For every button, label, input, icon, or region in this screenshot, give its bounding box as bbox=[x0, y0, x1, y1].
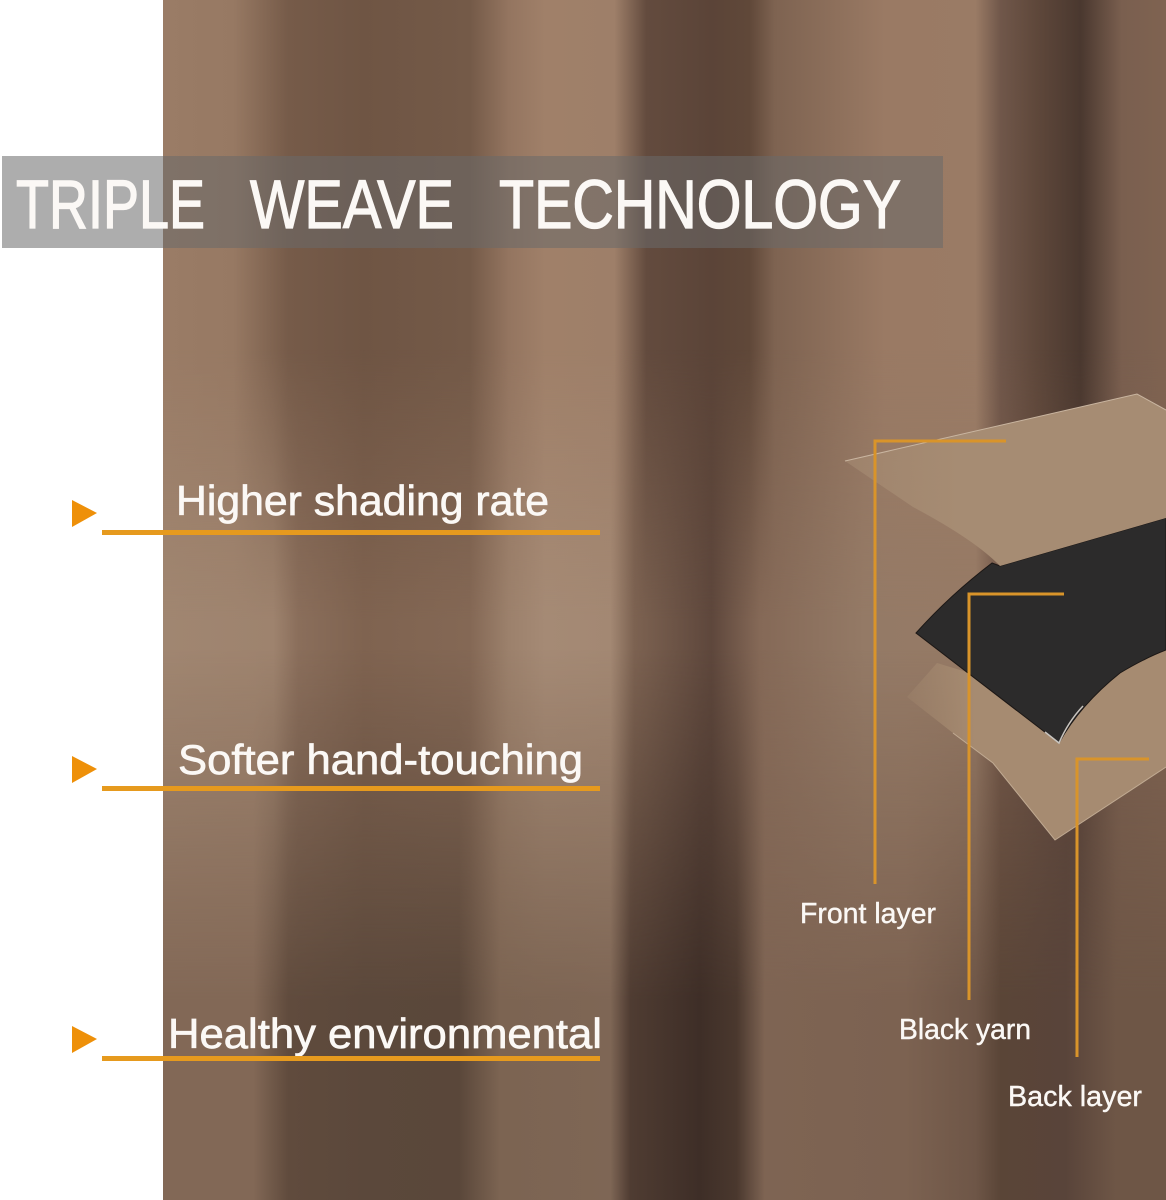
orange underline bbox=[102, 1056, 600, 1061]
feature: softer hand-touching bbox=[72, 736, 600, 791]
callout: front layer: Front layer bbox=[800, 898, 936, 930]
title banner bbox=[2, 156, 943, 248]
feature label: Softer hand-touching bbox=[178, 736, 583, 783]
feature label: Healthy environmental bbox=[168, 1010, 602, 1057]
back fabric layer bbox=[907, 640, 1166, 840]
callout: black yarn: Black yarn bbox=[899, 1014, 1031, 1046]
orange underline bbox=[102, 786, 600, 791]
black yarn layer bbox=[916, 518, 1166, 743]
front layer edge highlight bbox=[845, 394, 1166, 461]
icon: orange arrow marker bbox=[72, 756, 97, 783]
title banner: WEAVE bbox=[250, 166, 454, 243]
back layer edge highlight bbox=[953, 733, 1166, 840]
white edge highlight on black layer bbox=[1045, 706, 1083, 743]
icon: orange arrow marker bbox=[72, 1026, 97, 1053]
callout: front layer bbox=[800, 441, 1006, 930]
title banner: TRIPLE bbox=[16, 166, 205, 243]
front fabric layer bbox=[845, 394, 1166, 566]
callout: back layer: Back layer bbox=[1008, 1081, 1143, 1113]
callout: back layer bbox=[1008, 759, 1149, 1113]
icon: orange arrow marker bbox=[72, 500, 97, 527]
callout: black yarn bbox=[899, 594, 1064, 1046]
orange underline bbox=[102, 530, 600, 535]
diagram: fabric layers bbox=[845, 394, 1166, 840]
feature: healthy environmental bbox=[72, 1010, 602, 1061]
title banner: TECHNOLOGY bbox=[499, 166, 901, 243]
feature: higher shading rate bbox=[72, 477, 600, 535]
feature label: Higher shading rate bbox=[176, 477, 549, 524]
